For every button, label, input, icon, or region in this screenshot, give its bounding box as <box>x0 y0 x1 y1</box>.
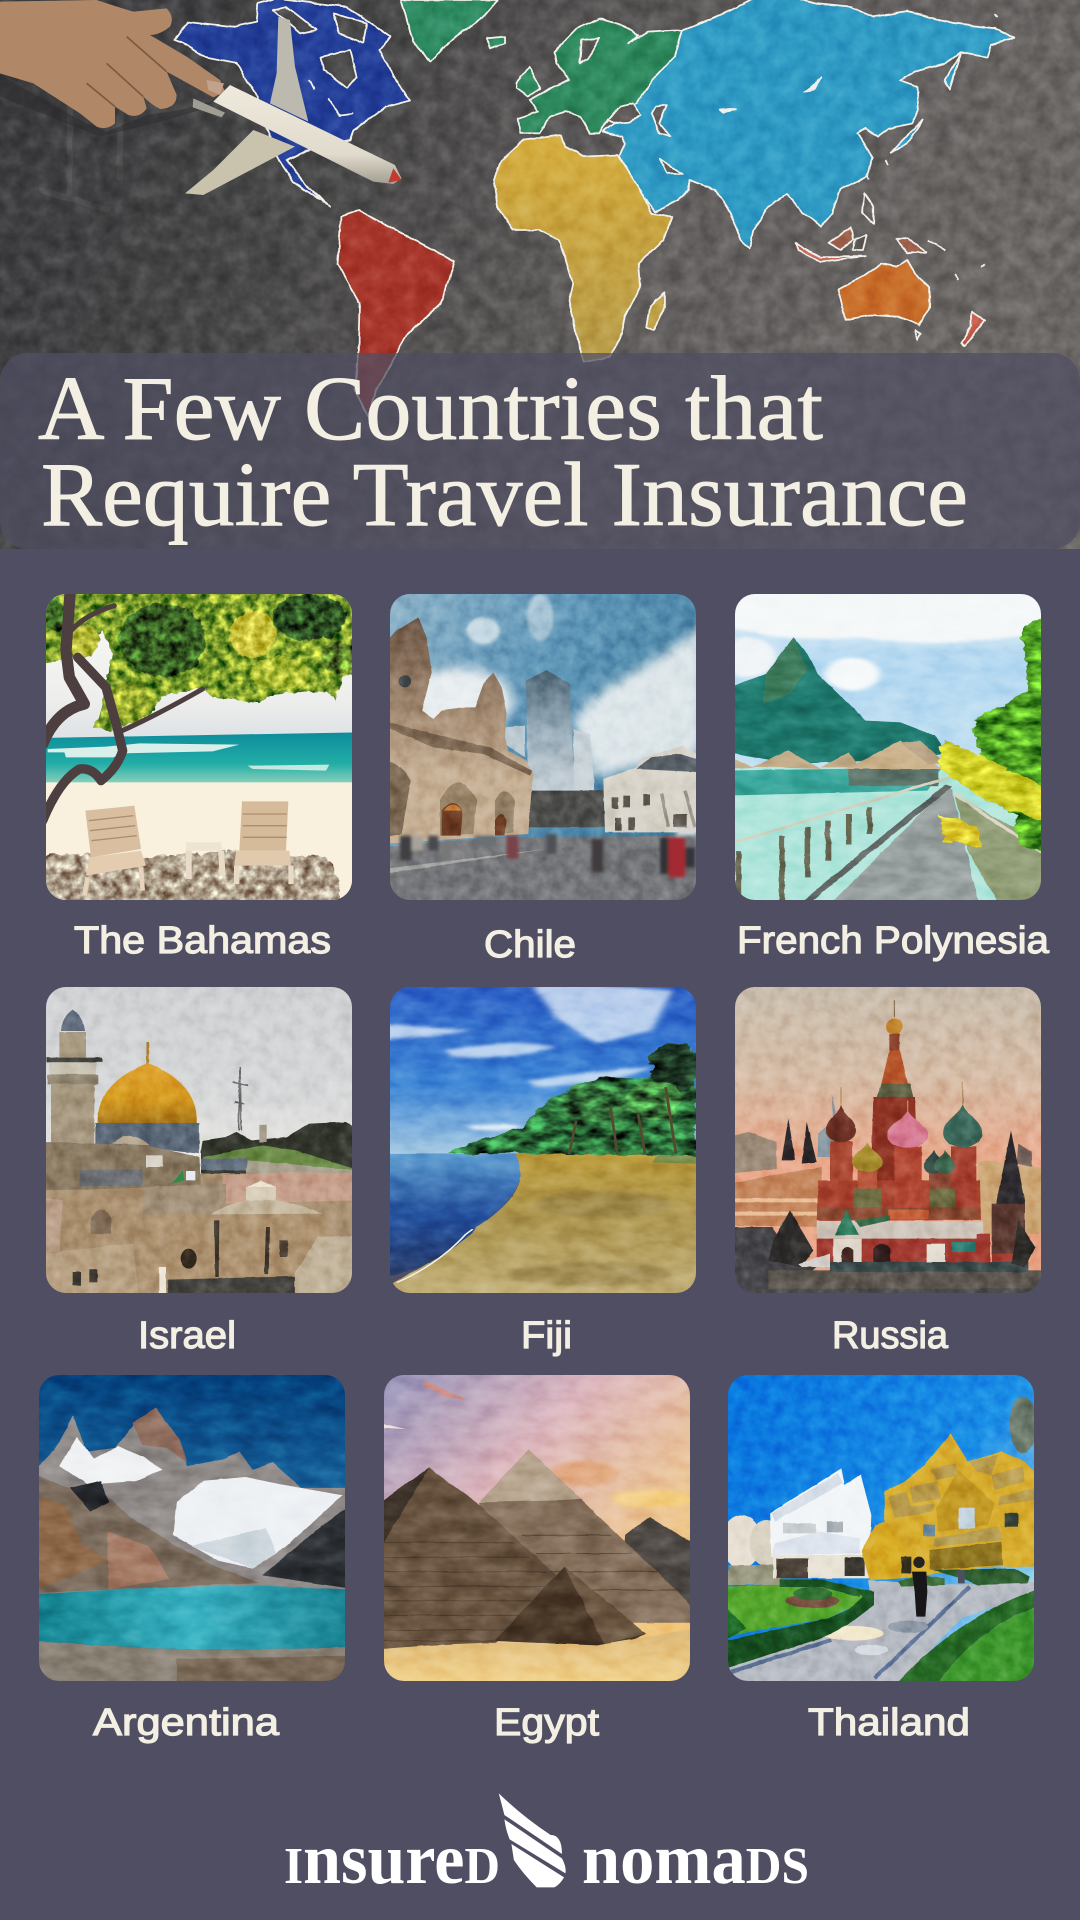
title <box>38 358 968 545</box>
lower walls <box>143 1184 226 1214</box>
tree trunk <box>43 594 203 821</box>
Eastern hemisphere <box>486 0 1015 362</box>
photo: Bora Bora boardwalk <box>735 594 1041 900</box>
far trees and hill <box>201 1122 359 1174</box>
white temple <box>770 1468 871 1557</box>
photo: Santiago cathedral and tower <box>383 587 703 907</box>
GUM building <box>728 1167 823 1227</box>
photo: Thai temples and garden <box>721 1368 1041 1688</box>
panel: Israel <box>39 980 359 1357</box>
label: Russia <box>832 1315 949 1357</box>
panel: Argentina <box>25 1368 359 1744</box>
lower white gallery <box>817 1220 983 1244</box>
chalk smudges <box>40 90 120 210</box>
title: Require Travel Insurance <box>41 444 968 545</box>
label: The Bahamas <box>74 920 331 962</box>
panel: Egypt <box>370 1368 704 1744</box>
header photo: world map on chalkboard <box>0 0 1080 580</box>
hand and airplane <box>0 0 402 195</box>
label: Argentina <box>93 1702 280 1744</box>
title: A Few Countries that <box>38 358 823 459</box>
domes <box>826 1104 856 1142</box>
upper old city <box>39 1142 201 1190</box>
wordmark left: InsureD <box>284 1819 500 1899</box>
label: French Polynesia <box>737 920 1050 962</box>
Americas and Greenland (coordinates from left crop) <box>338 0 497 417</box>
ground <box>390 836 696 876</box>
sand shadow <box>46 849 340 900</box>
label: Thailand <box>808 1702 970 1744</box>
label: Fiji <box>521 1315 572 1357</box>
panel: Thailand <box>721 1368 1041 1744</box>
right tower <box>992 1130 1025 1262</box>
photo: pyramids of Giza <box>370 1368 704 1688</box>
Dome of the Rock <box>146 1042 149 1065</box>
photo: palm beach <box>390 987 696 1293</box>
green bands <box>853 1189 955 1207</box>
cathedral <box>383 617 533 844</box>
square and crowd <box>728 1227 817 1300</box>
lawn <box>721 1585 871 1637</box>
wordmark right: nomaDS <box>582 1819 809 1899</box>
label: Israel <box>138 1315 236 1357</box>
photo: beach with chairs under a tree <box>39 587 359 907</box>
blossom trees <box>721 1515 761 1568</box>
photo: Saint Basil's Cathedral <box>728 980 1048 1300</box>
paving <box>721 1580 1041 1688</box>
photo: Jerusalem Dome of the Rock <box>39 980 359 1300</box>
body <box>817 1180 981 1220</box>
person <box>912 1572 927 1617</box>
panel: French Polynesia <box>721 587 1055 962</box>
mast <box>233 1067 248 1130</box>
right hedge and lawn <box>893 1588 1041 1688</box>
panel: Russia <box>728 980 1048 1357</box>
panel: The Bahamas <box>39 587 359 962</box>
logo: Insured Nomads <box>284 1793 809 1899</box>
photo: Fitz Roy and lagoon <box>25 1368 359 1688</box>
panel: Fiji <box>376 980 710 1357</box>
label: Chile <box>484 924 576 966</box>
chairs <box>85 806 141 857</box>
minaret <box>61 1010 85 1031</box>
title panel overlay <box>0 353 1080 549</box>
bushes by the gold temple <box>898 1575 945 1587</box>
label: Egypt <box>494 1702 599 1744</box>
panel: Chile <box>383 587 703 966</box>
central spire <box>894 1000 895 1017</box>
icon: striped wing <box>499 1793 566 1887</box>
palace <box>603 746 703 832</box>
gold temple <box>861 1433 1041 1580</box>
